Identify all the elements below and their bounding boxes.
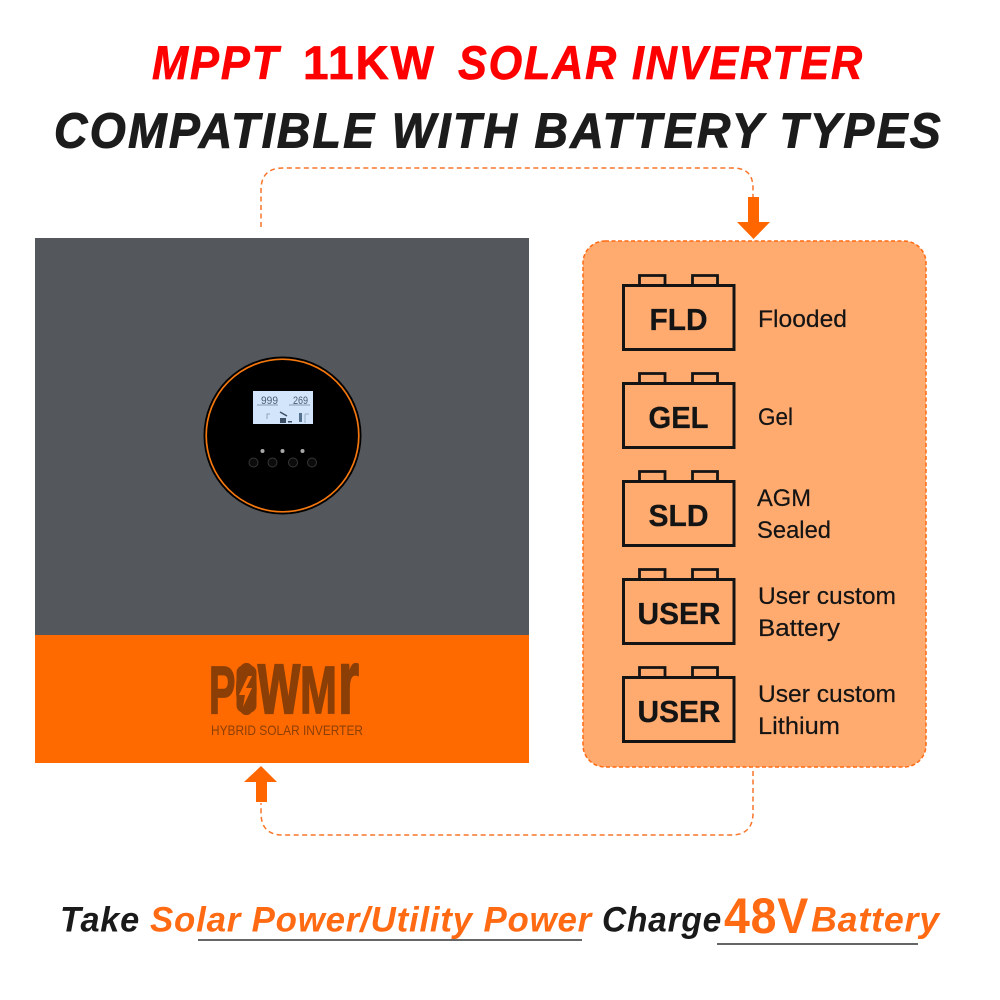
- buttons: [249, 458, 316, 467]
- battery: gel: GEL: [648, 401, 708, 435]
- PowMr logo: P: [209, 652, 235, 728]
- battery: sealed AGM: AGM: [757, 485, 811, 512]
- battery: user custom battery: Battery: [758, 615, 840, 642]
- battery: user custom lithium: USER: [638, 695, 720, 729]
- battery: flooded: FLD: [650, 303, 708, 337]
- PowMr logo: r: [338, 630, 359, 732]
- footer caption: [60, 888, 941, 944]
- title: red headline: 11KW: [303, 37, 436, 90]
- panel: inverter body: [35, 238, 529, 763]
- battery: user custom battery: USER: [638, 597, 720, 631]
- PowMr logo: w: [257, 630, 301, 732]
- battery: user custom battery: [624, 570, 896, 644]
- control panel: [204, 356, 362, 514]
- footer caption: Battery: [811, 900, 941, 940]
- footer caption: Take: [60, 900, 140, 940]
- panel: battery types: [583, 241, 926, 767]
- footer caption: 48V: [724, 888, 809, 944]
- title: red headline: SOLAR INVERTER: [458, 37, 864, 90]
- indicator lights: [260, 449, 304, 453]
- arrow: dashed path from inverter to battery panel: [261, 168, 770, 239]
- battery: user custom lithium: [624, 668, 896, 742]
- battery: sealed AGM: Sealed: [757, 517, 831, 544]
- battery: gel: Gel: [758, 404, 793, 431]
- battery: flooded: [624, 276, 847, 350]
- arrow: dashed path from battery panel back to inverter: [244, 766, 753, 835]
- logo tagline: HYBRID SOLAR INVERTER: [211, 722, 363, 738]
- PowMr logo: o: [235, 631, 258, 733]
- battery: gel: [624, 374, 793, 448]
- LCD screen: [253, 391, 313, 424]
- LCD screen: 999: [261, 395, 278, 407]
- battery: user custom lithium: Lithium: [758, 713, 840, 740]
- title: red headline: [152, 37, 864, 90]
- battery: user custom lithium: User custom: [758, 681, 896, 708]
- title: black subheading: COMPATIBLE WITH BATTERY TYPES: [54, 104, 943, 158]
- battery: sealed AGM: [624, 472, 831, 546]
- battery: user custom battery: User custom: [758, 583, 896, 610]
- footer caption: Solar Power/Utility Power: [150, 900, 594, 940]
- battery: flooded: Flooded: [758, 306, 847, 333]
- footer caption: Charge: [602, 900, 722, 940]
- battery: sealed AGM: SLD: [648, 499, 708, 533]
- PowMr logo: M: [300, 653, 337, 728]
- PowMr logo: [209, 630, 359, 733]
- title: red headline: MPPT: [152, 37, 282, 90]
- LCD screen: 269: [293, 395, 308, 407]
